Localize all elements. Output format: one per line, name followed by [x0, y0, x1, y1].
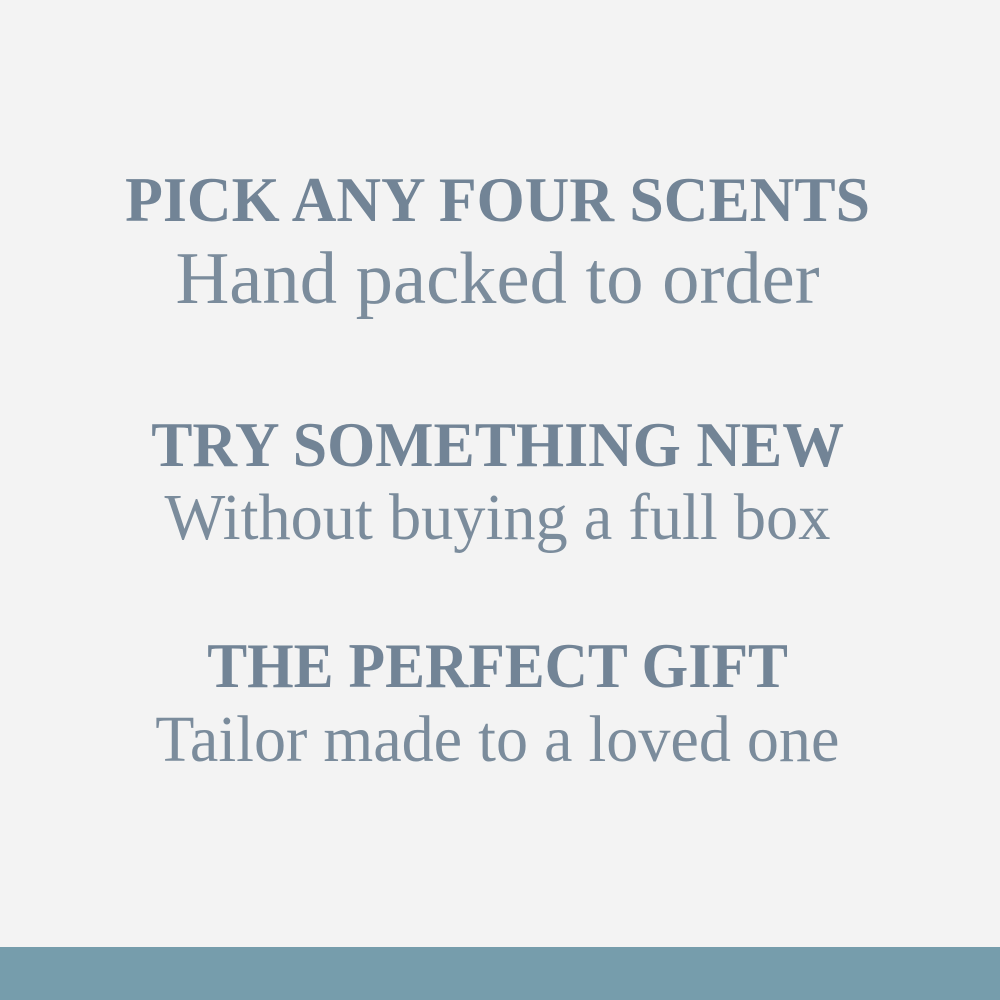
subtext: without buying a full box: Without buying a full box	[165, 481, 830, 554]
heading: pick any four scents: PICK ANY FOUR SCENTS	[125, 164, 870, 235]
subtext: hand packed to order: Hand packed to order	[175, 238, 820, 320]
heading: the perfect gift: THE PERFECT GIFT	[207, 630, 788, 701]
heading: try something new: TRY SOMETHING NEW	[151, 409, 844, 480]
subtext: tailor made to a loved one: Tailor made to a loved one	[155, 703, 840, 776]
footer bar	[0, 947, 1000, 1000]
